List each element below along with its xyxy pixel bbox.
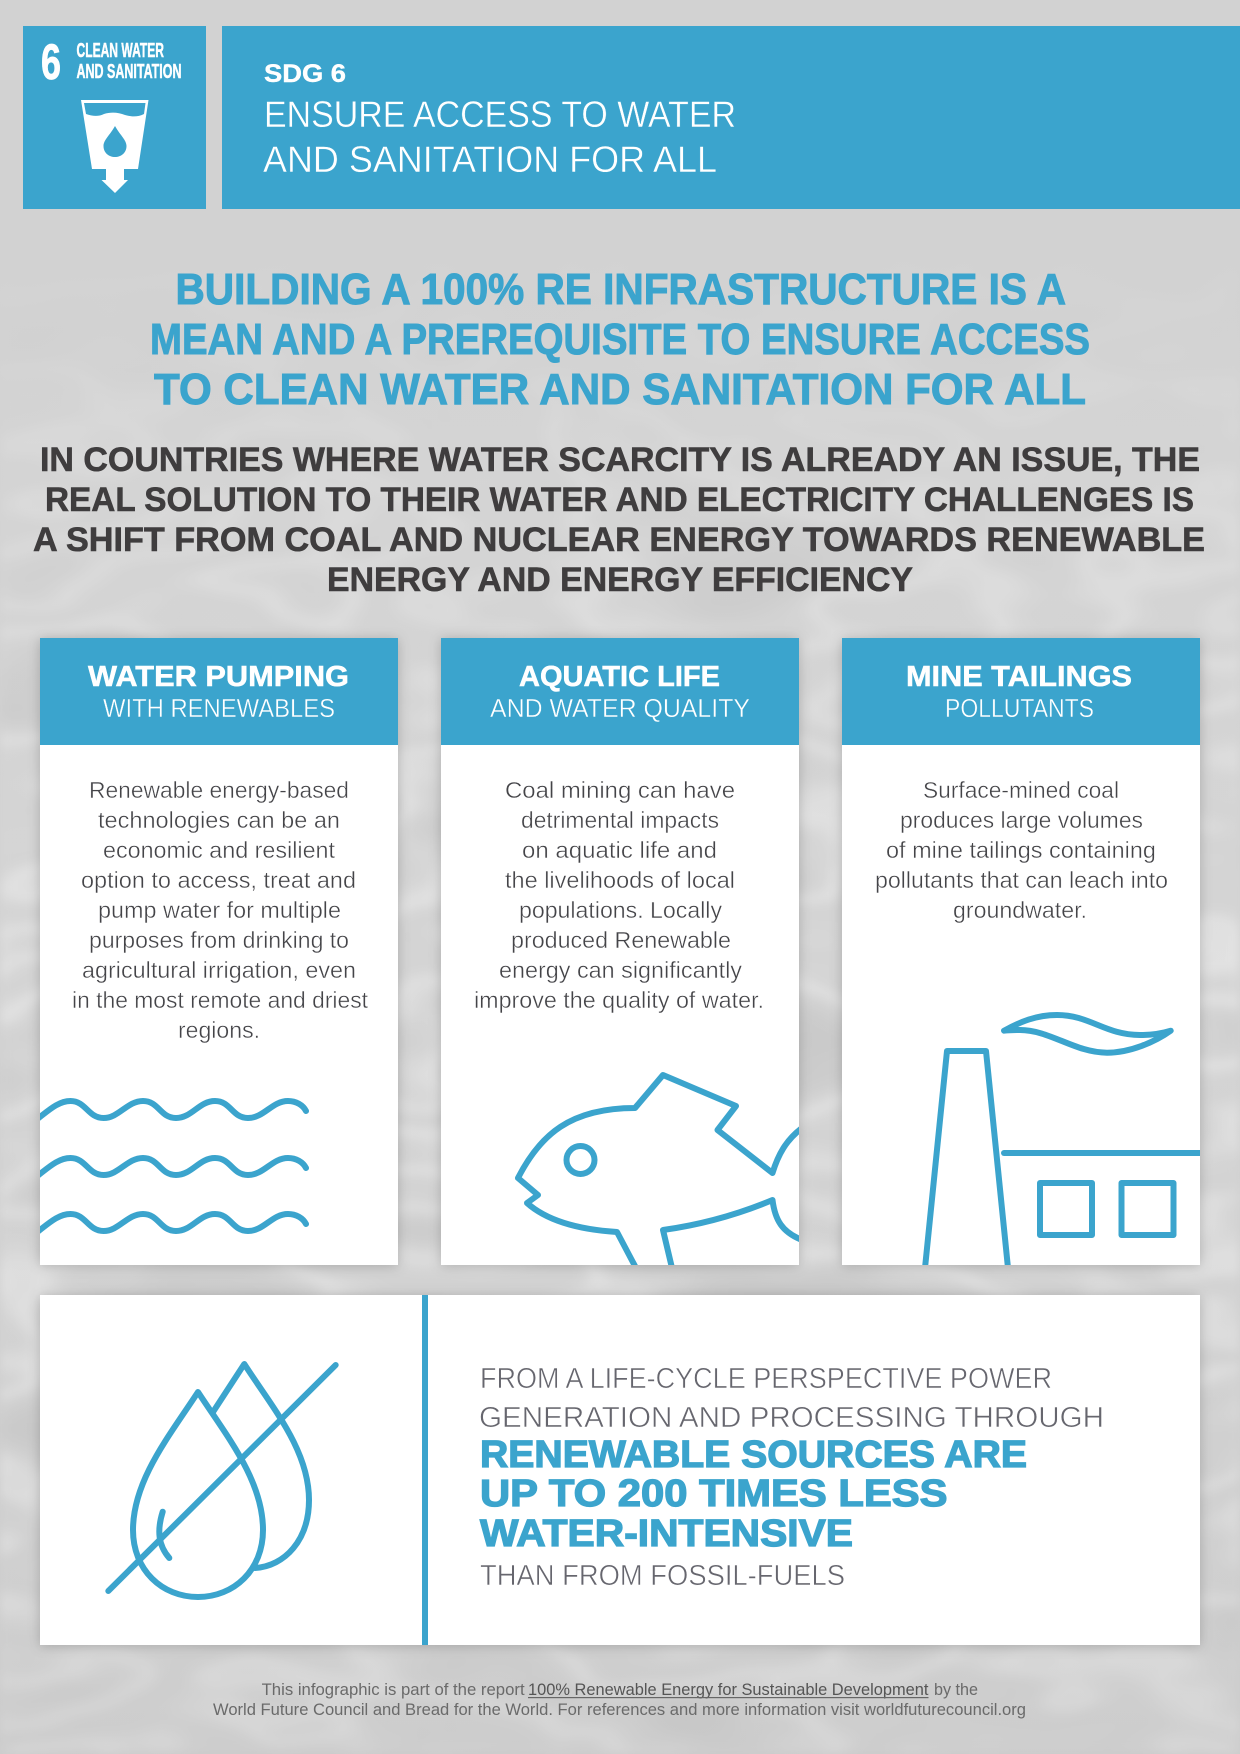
text: mine tailings description: of mine tailings containing <box>886 837 1156 863</box>
dark sub-heading: REAL SOLUTION TO THEIR WATER AND ELECTRICITY CHALLENGES IS <box>45 481 1194 519</box>
text: water pumping description: technologies can be an <box>98 807 340 833</box>
text: water pumping description: option to access, treat and <box>81 867 356 893</box>
footer credit: World Future Council and Bread for the World. For references and more information visit worldfuturecouncil.org <box>213 1701 1026 1719</box>
panel: aquatic life: AND WATER QUALITY <box>490 693 750 723</box>
text: water pumping description: agricultural irrigation, even <box>82 957 356 983</box>
SDG 6 badge: AND SANITATION <box>76 61 182 83</box>
SDG 6 badge: 6 <box>41 34 61 90</box>
header banner <box>222 26 1240 209</box>
header banner: AND SANITATION FOR ALL <box>263 139 717 180</box>
panel: water pumping: WITH RENEWABLES <box>103 693 335 723</box>
dark sub-heading: ENERGY AND ENERGY EFFICIENCY <box>327 561 913 599</box>
header banner: ENSURE ACCESS TO WATER <box>264 94 736 135</box>
text: aquatic life description: detrimental impacts <box>521 807 719 833</box>
main blue heading: BUILDING A 100% RE INFRASTRUCTURE IS A <box>176 265 1066 314</box>
text: mine tailings description: Surface-mined coal <box>923 777 1119 803</box>
dark sub-heading: IN COUNTRIES WHERE WATER SCARCITY IS ALREADY AN ISSUE, THE <box>40 441 1200 479</box>
text: aquatic life description: populations. Locally <box>519 897 722 923</box>
text: water pumping description: in the most remote and driest <box>72 987 369 1013</box>
text: water pumping description: pump water for multiple <box>98 897 341 923</box>
text: aquatic life description <box>474 777 764 1013</box>
text: aquatic life description: produced Renewable <box>511 927 731 953</box>
text: water pumping description <box>72 777 369 1043</box>
panel: mine tailings <box>842 638 1204 1268</box>
text: life-cycle statement <box>479 1363 1104 1592</box>
panel: mine tailings: POLLUTANTS <box>945 693 1094 723</box>
text: life-cycle statement: FROM A LIFE-CYCLE PERSPECTIVE POWER <box>480 1363 1052 1395</box>
footer credit: This infographic is part of the report <box>262 1681 525 1699</box>
main blue heading <box>150 265 1090 414</box>
text: life-cycle statement: RENEWABLE SOURCES ARE <box>480 1434 1027 1476</box>
text: water pumping description: economic and resilient <box>103 837 336 863</box>
main blue heading: MEAN AND A PREREQUISITE TO ENSURE ACCESS <box>150 315 1090 364</box>
footer credit <box>213 1681 1026 1719</box>
footer credit: 100% Renewable Energy for Sustainable Development <box>528 1681 929 1699</box>
icon: waves <box>36 1101 306 1233</box>
SDG 6 badge <box>23 26 206 209</box>
text: mine tailings description <box>875 777 1168 923</box>
text: life-cycle statement: WATER-INTENSIVE <box>480 1513 853 1555</box>
text: aquatic life description: energy can significantly <box>499 957 743 983</box>
dark sub-heading: A SHIFT FROM COAL AND NUCLEAR ENERGY TOWARDS RENEWABLE <box>33 521 1205 559</box>
panel: water pumping <box>36 638 398 1265</box>
panel: water pumping: WATER PUMPING <box>88 661 349 693</box>
text: mine tailings description: produces large volumes <box>900 807 1143 833</box>
icon: crossed-out water drops <box>108 1364 336 1597</box>
text: mine tailings description: pollutants that can leach into <box>875 867 1168 893</box>
text: mine tailings description: groundwater. <box>953 897 1087 923</box>
text: water pumping description: Renewable energy-based <box>89 777 349 803</box>
text: aquatic life description: on aquatic life and <box>522 837 717 863</box>
panel: aquatic life: AQUATIC LIFE <box>519 661 720 693</box>
dark sub-heading <box>33 441 1205 599</box>
text: aquatic life description: improve the quality of water. <box>474 987 764 1013</box>
SDG 6 badge: CLEAN WATER <box>76 40 164 62</box>
footer credit: by the <box>934 1681 978 1699</box>
text: life-cycle statement: UP TO 200 TIMES LESS <box>480 1473 948 1515</box>
icon: fish <box>518 1075 802 1268</box>
text: life-cycle statement: THAN FROM FOSSIL-FUELS <box>480 1560 845 1592</box>
text: aquatic life description: the livelihoods of local <box>505 867 735 893</box>
panel: mine tailings: MINE TAILINGS <box>906 661 1132 693</box>
text: aquatic life description: Coal mining can have <box>505 777 735 803</box>
text: water pumping description: purposes from drinking to <box>89 927 349 953</box>
text: water pumping description: regions. <box>178 1017 260 1043</box>
panel: aquatic life <box>441 638 802 1268</box>
text: life-cycle statement: GENERATION AND PROCESSING THROUGH <box>479 1402 1104 1434</box>
icon: glass with water drop and arrow <box>81 100 148 193</box>
panel: life-cycle callout <box>40 1295 1200 1645</box>
icon: factory with smoke <box>925 1015 1204 1268</box>
header banner: SDG 6 <box>264 60 346 88</box>
main blue heading: TO CLEAN WATER AND SANITATION FOR ALL <box>154 365 1086 414</box>
